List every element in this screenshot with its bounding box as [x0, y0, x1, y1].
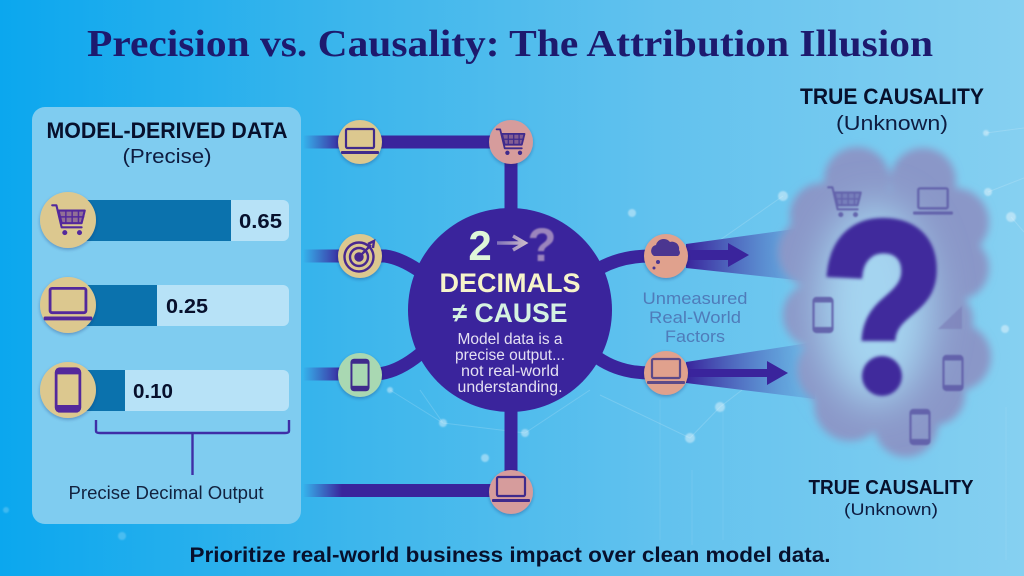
faded icons in cloud — [814, 187, 962, 444]
big question mark — [824, 215, 940, 398]
node: laptop factor — [644, 351, 688, 395]
not equal cause text: ≠ CAUSE — [452, 298, 568, 328]
node: laptop top — [338, 120, 382, 164]
central circle — [408, 208, 612, 412]
panel: model-derived data — [32, 107, 301, 524]
bottom causality subheading: (Unknown) — [844, 500, 938, 519]
bottom takeaway: Prioritize real-world business impact over clean model data. — [190, 544, 831, 567]
title: Precision vs. Causality: The Attribution Illusion — [87, 23, 933, 65]
unmeasured factors label: Unmeasured — [642, 290, 748, 308]
circle body text: not real-world — [461, 363, 559, 380]
cloud inner glow — [819, 205, 931, 405]
bracket — [96, 420, 289, 475]
blurred question: ? — [528, 218, 556, 271]
bar: phone 0.10 — [40, 362, 289, 418]
unmeasured factors label — [642, 290, 748, 346]
big question mark: ? — [821, 172, 945, 441]
top causality heading: TRUE CAUSALITY — [800, 84, 984, 109]
node: laptop bottom — [489, 470, 533, 514]
bar: laptop 0.25 — [40, 277, 289, 333]
panel subheading: (Precise) — [122, 146, 212, 168]
bar: laptop 0.25: 0.25 — [166, 296, 208, 318]
beam upper — [686, 229, 805, 281]
circle body text: precise output... — [455, 347, 565, 364]
circle body text — [455, 331, 565, 396]
cloud of unknown causality — [778, 147, 991, 457]
node: phone — [338, 353, 382, 397]
blurred cloud — [778, 147, 991, 457]
connectors — [303, 142, 650, 490]
circle body text: Model data is a — [458, 331, 563, 348]
node: cart top — [489, 120, 533, 164]
circle body text: understanding. — [458, 379, 562, 396]
top causality subheading: (Unknown) — [836, 113, 948, 135]
unmeasured factors label: Factors — [665, 328, 725, 346]
node: target — [338, 234, 382, 278]
bracket label: Precise Decimal Output — [68, 483, 264, 503]
bar: phone 0.10: 0.10 — [133, 381, 173, 403]
node: cloud factor — [644, 234, 688, 278]
bottom causality heading: TRUE CAUSALITY — [808, 477, 974, 499]
number two: 2 — [468, 222, 492, 269]
decimals text: DECIMALS — [440, 268, 580, 298]
panel heading: MODEL-DERIVED DATA — [46, 118, 288, 143]
bar: cart 0.65: 0.65 — [239, 211, 282, 233]
bar: cart 0.65 — [40, 192, 289, 248]
arrow to question — [497, 236, 525, 250]
arrow lower — [688, 361, 788, 385]
beam lower — [686, 342, 815, 399]
unmeasured factors label: Real-World — [649, 309, 741, 327]
arrow upper — [688, 243, 749, 267]
